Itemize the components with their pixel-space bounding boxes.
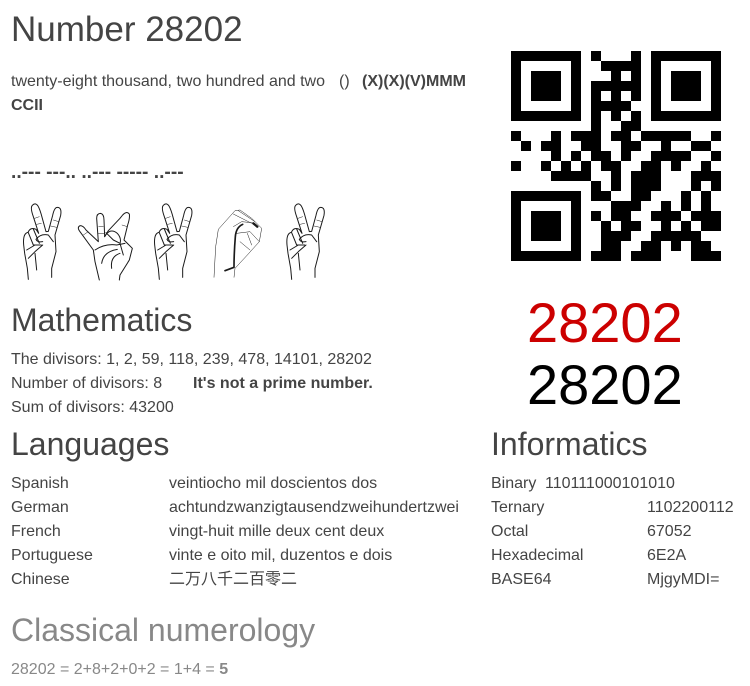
- languages table: Portuguese: [11, 547, 93, 564]
- languages table: 二万八千二百零二: [169, 571, 297, 588]
- mathematics facts: Number of divisors: 8: [11, 375, 162, 392]
- heading: classical numerology: Classical numerology: [11, 612, 315, 648]
- languages table: [11, 475, 459, 588]
- languages table: achtundzwanzigtausendzweihundertzwei: [169, 499, 459, 516]
- numerology sum: 28202 = 2+8+2+0+2 = 1+4 = 5: [11, 661, 228, 678]
- languages table: Chinese: [11, 571, 70, 588]
- title: Number 28202: [11, 10, 243, 49]
- informatics table: Hexadecimal: [491, 547, 583, 564]
- informatics table: BASE64: [491, 571, 551, 588]
- number in words and roman numeral: twenty-eight thousand, two hundred and two: [11, 73, 325, 90]
- informatics table: 6E2A: [647, 547, 686, 564]
- languages table: veintiocho mil doscientos dos: [169, 475, 377, 492]
- number in words and roman numeral: [11, 73, 466, 114]
- mathematics facts: It's not a prime number.: [193, 375, 373, 392]
- sign language hands: [23, 203, 325, 280]
- languages table: German: [11, 499, 69, 516]
- informatics table: [491, 475, 734, 588]
- morse code: ..--- ---.. ..--- ----- ..---: [11, 162, 184, 183]
- number in words and roman numeral: (X)(X)(V)MMM: [362, 73, 466, 90]
- heading: mathematics: Mathematics: [11, 302, 192, 338]
- QR code: [511, 51, 721, 261]
- heading: languages: Languages: [11, 426, 169, 462]
- informatics table: 110111000101010: [545, 475, 675, 492]
- red number: 28202: [527, 291, 683, 354]
- black number: 28202: [527, 353, 683, 416]
- informatics table: Octal: [491, 523, 528, 540]
- icon: hand sign two: [24, 204, 61, 279]
- number in words and roman numeral: CCII: [11, 97, 43, 114]
- mathematics facts: [11, 351, 373, 416]
- languages table: vingt-huit mille deux cent deux: [169, 523, 384, 540]
- mathematics facts: Sum of divisors: 43200: [11, 399, 174, 416]
- icon: hand sign zero: [214, 210, 262, 277]
- icon: hand sign two: [155, 204, 192, 279]
- icon: hand sign two: [287, 204, 324, 279]
- informatics table: MjgyMDI=: [647, 571, 719, 588]
- heading: informatics: Informatics: [491, 426, 647, 462]
- languages table: Spanish: [11, 475, 69, 492]
- informatics table: Ternary: [491, 499, 544, 516]
- informatics table: 1102200112: [647, 499, 734, 516]
- number in words and roman numeral: (): [339, 73, 350, 90]
- informatics table: 67052: [647, 523, 692, 540]
- informatics table: Binary: [491, 475, 536, 492]
- languages table: French: [11, 523, 61, 540]
- mathematics facts: The divisors: 1, 2, 59, 118, 239, 478, 14101, 28202: [11, 351, 372, 368]
- languages table: vinte e oito mil, duzentos e dois: [169, 547, 392, 564]
- icon: hand sign eight: [78, 213, 132, 280]
